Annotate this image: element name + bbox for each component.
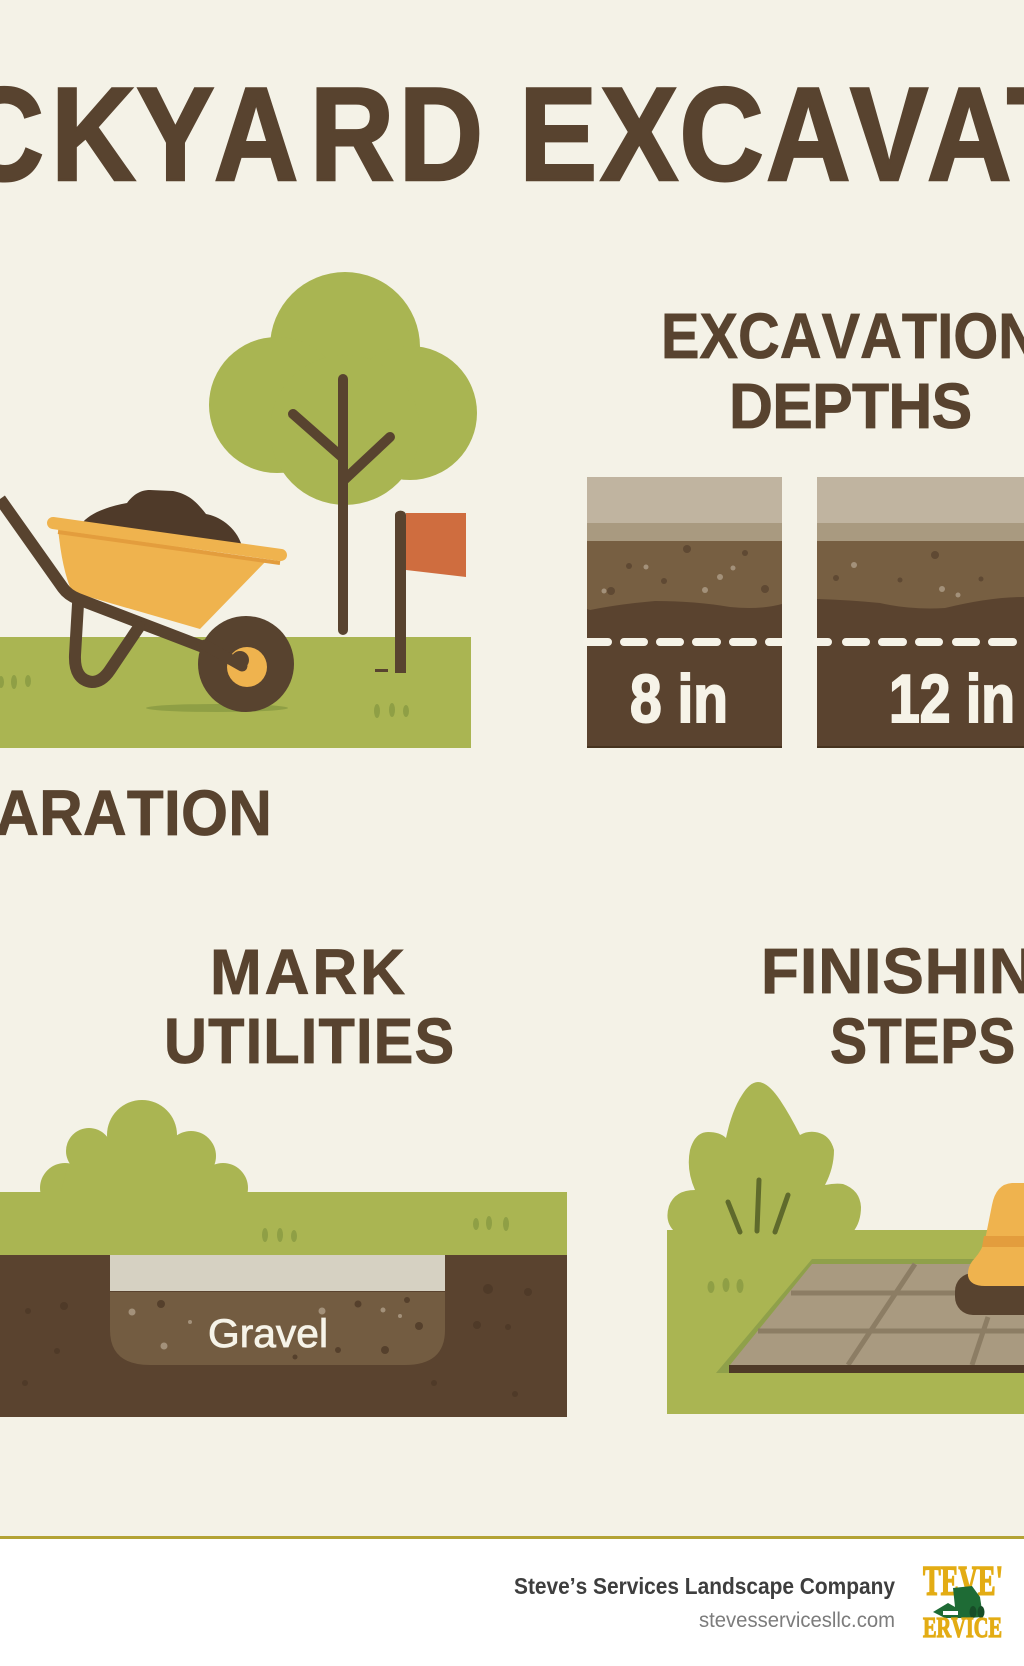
- grass tufts: [708, 1278, 744, 1293]
- lawn: [0, 1192, 567, 1255]
- depth card: 8 in: [587, 477, 782, 748]
- patio: [716, 1259, 1024, 1373]
- panel: mark utilities: [0, 937, 567, 1417]
- ground: [0, 637, 471, 748]
- icon: flag: [375, 511, 466, 673]
- soil cross-section: [0, 1255, 567, 1417]
- depth card: 8 in: 8 in: [630, 661, 728, 737]
- heading: finishing steps: STEPS: [830, 1005, 1015, 1077]
- grass tufts: [0, 675, 409, 718]
- logo: [923, 1559, 1003, 1644]
- footer: [0, 1536, 1024, 1666]
- icon: wheelbarrow: [0, 490, 294, 712]
- lawn: [667, 1230, 1024, 1414]
- heading: finishing steps: [761, 936, 1024, 1077]
- concrete layer: [110, 1255, 445, 1291]
- panel: excavation depths: [587, 300, 1024, 748]
- grass tufts: [262, 1216, 509, 1242]
- website: stevesservicesllc.com: [699, 1609, 895, 1632]
- heading: mark utilities: MARK: [210, 937, 405, 1008]
- icon: bush: [667, 1082, 861, 1232]
- heading: excavation depths: [661, 300, 1024, 442]
- heading: mark utilities: UTILITIES: [164, 1006, 454, 1077]
- depth card: 12 in: [817, 477, 1024, 748]
- heading: mark utilities: [164, 937, 454, 1077]
- label: gravel: Gravel: [208, 1312, 328, 1356]
- panel: preparation: [0, 272, 477, 849]
- icon: bush: [40, 1100, 248, 1213]
- heading: excavation depths: DEPTHS: [729, 371, 972, 442]
- gravel layer: [110, 1292, 445, 1365]
- icon: tree: [209, 272, 477, 630]
- soil specks: [22, 1284, 532, 1397]
- icon: tamper machine: [955, 1183, 1024, 1315]
- panel: finishing steps: [667, 936, 1024, 1414]
- company name: Steve’s Services Landscape Company: [514, 1573, 895, 1599]
